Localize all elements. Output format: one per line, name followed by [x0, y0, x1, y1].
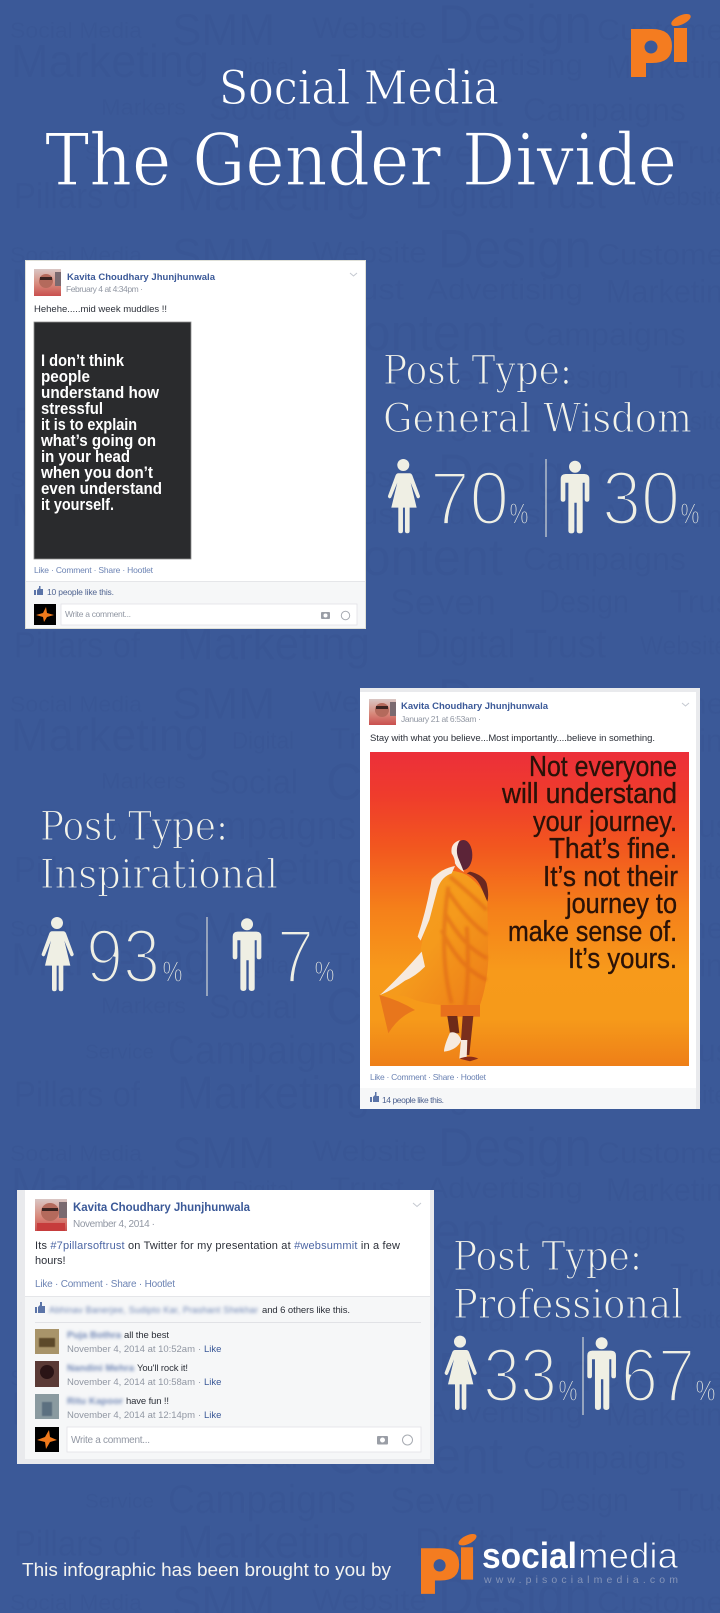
avatar [35, 1199, 67, 1231]
chevron [350, 273, 357, 276]
quote text: your journey. [533, 806, 677, 838]
post author: Kavita Choudhary Jhunjhunwala [73, 1202, 251, 1214]
quote text: make sense of. [508, 916, 677, 948]
quote text: It’s yours. [568, 943, 677, 975]
comment 3 [35, 1394, 221, 1421]
post author: Kavita Choudhary Jhunjhunwala [401, 701, 549, 712]
stat: female 93 percent: 93 [86, 914, 160, 1000]
actions: Like · Comment · Share · Hootlet [35, 1279, 175, 1290]
post type heading: Post Type: [40, 804, 228, 850]
icon: male [233, 918, 261, 991]
logo: pi social media footer: social [482, 1535, 577, 1576]
post type heading: Post Type: [383, 348, 572, 394]
comment box [35, 1427, 421, 1452]
post text [35, 1240, 400, 1267]
likes: Abhinav Banerjee, Sudipto Kar, Prashant Shekhar [49, 1305, 258, 1315]
comment 2: Like [204, 1377, 221, 1388]
post text: Its #7pillarsoftrust on Twitter for my presentation at #websummit in a few [35, 1240, 400, 1252]
post date: November 4, 2014 · [73, 1219, 155, 1230]
comment 1: November 4, 2014 at 10:52am [67, 1344, 195, 1355]
comment 1: Like [204, 1344, 221, 1355]
comment 1: · [198, 1344, 201, 1355]
panel: professional post card [17, 1190, 434, 1464]
quote text [501, 751, 678, 975]
stat: female 70 percent: % [510, 498, 528, 530]
panel: inspirational post card [360, 688, 700, 1109]
illustration: monk [379, 840, 488, 1061]
post author: Kavita Choudhary Jhunjhunwala [67, 272, 216, 283]
title [45, 61, 677, 202]
icon: female [42, 917, 74, 991]
chevron [413, 1203, 421, 1206]
post type heading: Professional [453, 1282, 683, 1328]
post text: Stay with what you believe...Most importantly....believe in something. [370, 733, 655, 744]
likes: 14 people like this. [382, 1095, 444, 1105]
stat: female 33 percent: 33 [483, 1334, 557, 1418]
comment 1: Puja Bothra [67, 1330, 122, 1341]
stat: male 7 percent: % [314, 956, 334, 988]
quote image: when you don’t [40, 463, 153, 482]
post type heading: Inspirational [40, 852, 278, 898]
icon: female [388, 459, 420, 533]
post type heading: Post Type: [453, 1234, 642, 1280]
stat: female 70 percent: 70 [430, 456, 509, 542]
likes: 10 people like this. [47, 587, 114, 597]
footer credit text: This infographic has been brought to you by [22, 1559, 392, 1580]
stat: female 33 percent: % [558, 1376, 578, 1408]
comment 1 [35, 1329, 221, 1355]
quote text: journey to [565, 888, 677, 920]
quote text: Not everyone [529, 751, 677, 783]
title: Social Media [219, 61, 499, 116]
quote image: stressful [41, 399, 103, 418]
quote image: it yourself. [41, 495, 114, 514]
comment box [34, 604, 357, 625]
monk quote image [370, 751, 689, 1066]
comment 2: · [198, 1377, 201, 1388]
logo: pi social media footer: www.pisocialmedia.com [483, 1574, 678, 1586]
logo: pi social media footer [421, 1532, 679, 1594]
comment 3: Like [204, 1410, 221, 1421]
post type heading: General Wisdom [383, 396, 692, 442]
post text: hours! [35, 1255, 66, 1267]
stat: male 30 percent: % [680, 498, 700, 530]
comment box: Write a comment... [65, 609, 131, 619]
quote image: understand how [41, 383, 160, 402]
icon: male [561, 461, 589, 533]
comment 3: · [198, 1410, 201, 1421]
panel: general wisdom post card [25, 260, 366, 629]
likes [35, 1302, 350, 1316]
comment 3: November 4, 2014 at 12:14pm [67, 1410, 195, 1421]
icon: female [445, 1336, 477, 1410]
quote image [34, 322, 191, 559]
post date: February 4 at 4:34pm · [66, 284, 143, 294]
comment 2: November 4, 2014 at 10:58am [67, 1377, 195, 1388]
actions: Like · Comment · Share · Hootlet [370, 1072, 487, 1082]
post type heading [453, 1234, 683, 1328]
post type heading [40, 804, 278, 898]
quote image: people [41, 367, 90, 386]
comment 3: Ritu Kapoor [67, 1396, 123, 1407]
likes: and 6 others like this. [262, 1305, 350, 1316]
logo: pi top right [631, 11, 692, 77]
quote text: will understand [501, 778, 677, 810]
comment 2: Nandini Mehra [67, 1363, 135, 1374]
title: The Gender Divide [45, 118, 677, 202]
logo: pi social media footer: media [578, 1535, 679, 1576]
stat: male 7 percent: 7 [277, 914, 314, 1000]
quote image: what’s going on [40, 431, 156, 450]
comment 2 [35, 1361, 221, 1388]
quote image: it is to explain [41, 415, 137, 434]
quote image: in your head [41, 447, 130, 466]
panel: general wisdom stats [383, 348, 700, 542]
stat: male 30 percent: 30 [602, 456, 680, 542]
post text: Hehehe.....mid week muddles !! [34, 304, 167, 315]
actions: Like · Comment · Share · Hootlet [34, 565, 154, 575]
comment 1: all the best [124, 1330, 169, 1341]
quote image: even understand [41, 479, 162, 498]
post date: January 21 at 6:53am · [401, 714, 481, 724]
comment 2: You'll rock it! [137, 1363, 188, 1374]
comment box: Write a comment... [71, 1435, 150, 1446]
comment 3: have fun !! [126, 1396, 169, 1407]
chevron [682, 703, 689, 706]
quote text: That’s fine. [549, 833, 677, 865]
post type heading [383, 348, 692, 442]
avatar [369, 699, 396, 725]
panel: inspirational stats [40, 804, 334, 1000]
stat: female 93 percent: % [162, 956, 182, 988]
quote text: It’s not their [543, 861, 678, 893]
stat: male 67 percent: 67 [621, 1334, 695, 1418]
likes [370, 1092, 444, 1105]
quote image: I don’t think [41, 351, 124, 370]
avatar [34, 269, 61, 296]
panel: professional stats [445, 1234, 716, 1418]
icon: male [587, 1337, 616, 1410]
